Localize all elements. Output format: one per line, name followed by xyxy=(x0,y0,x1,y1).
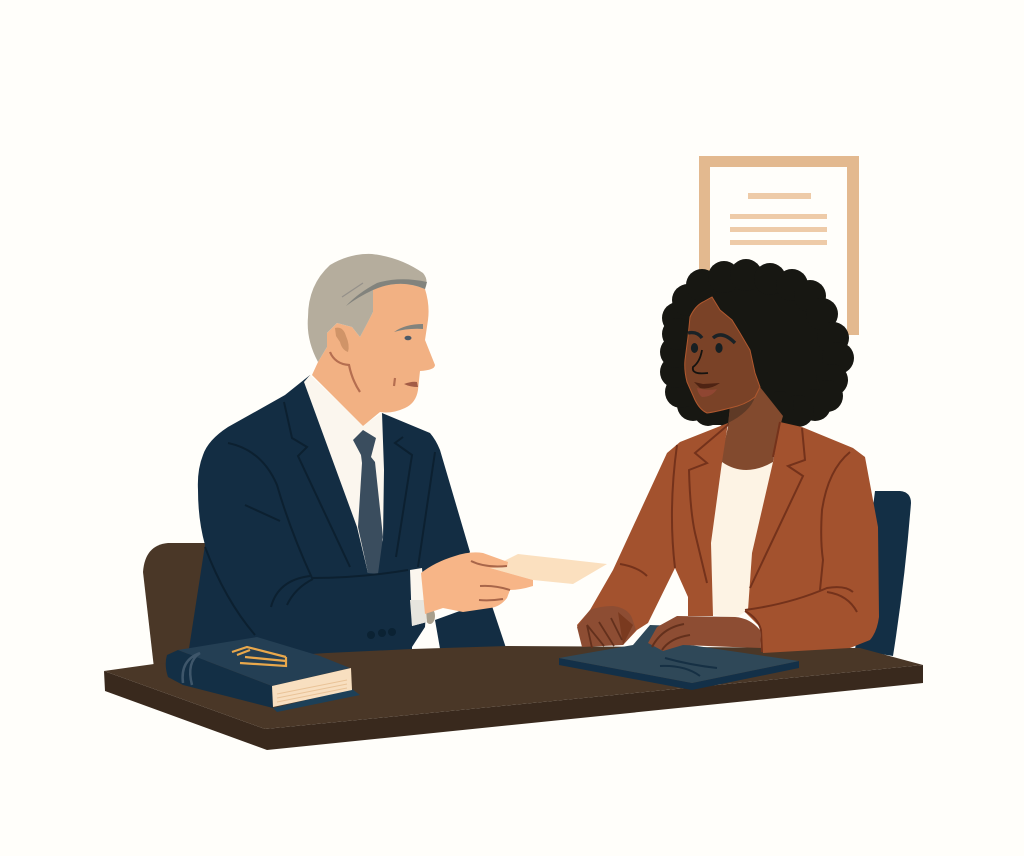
man: shirt xyxy=(304,375,384,573)
woman: left hand xyxy=(577,606,636,648)
woman: blazer left xyxy=(577,423,728,645)
framed document on wall xyxy=(699,156,859,357)
man: hair shade xyxy=(346,279,427,306)
man xyxy=(186,254,510,668)
woman: eyebrows xyxy=(688,333,735,343)
man: neck creases xyxy=(330,352,395,392)
woman: nose xyxy=(693,350,708,373)
table: front edge xyxy=(104,665,923,750)
book: bottom cover xyxy=(273,689,360,712)
paper being passed xyxy=(490,554,607,584)
woman: blazer right xyxy=(745,422,879,653)
woman: top xyxy=(711,462,773,618)
woman: right hand xyxy=(648,616,761,651)
book: side and spine xyxy=(166,650,273,708)
woman: neck xyxy=(720,387,783,471)
folder xyxy=(559,625,799,690)
man: suit jacket xyxy=(186,375,470,668)
man: watch xyxy=(425,608,435,624)
woman: eyes xyxy=(691,343,723,353)
book: top cover xyxy=(178,637,350,686)
chair: left xyxy=(143,543,205,668)
man: lapels and suit seams xyxy=(205,402,435,635)
table: top surface xyxy=(104,646,923,729)
chair: right xyxy=(855,491,911,656)
woman: blazer lines xyxy=(620,422,857,652)
book: gold emblem xyxy=(232,647,286,666)
book xyxy=(166,637,360,712)
woman: face xyxy=(685,297,760,413)
man: hand xyxy=(421,552,533,614)
man: lower sleeve xyxy=(435,600,510,660)
woman: mouth xyxy=(694,382,720,397)
book: spine bands xyxy=(183,653,200,685)
man: head xyxy=(312,283,435,426)
man: hair xyxy=(308,254,427,362)
woman: hair xyxy=(660,259,854,427)
man: ear detail xyxy=(335,328,349,352)
man: shirt cuff xyxy=(410,568,427,626)
woman: neck shadow xyxy=(728,397,755,423)
man: eye xyxy=(404,336,412,340)
woman xyxy=(559,259,879,690)
man: eyebrow xyxy=(394,324,423,332)
book: pages xyxy=(272,668,352,707)
man: sleeve buttons xyxy=(367,628,396,639)
man: mouth xyxy=(404,382,418,387)
man: tie xyxy=(353,430,383,574)
man: hair strand xyxy=(342,283,363,297)
table xyxy=(104,646,923,750)
